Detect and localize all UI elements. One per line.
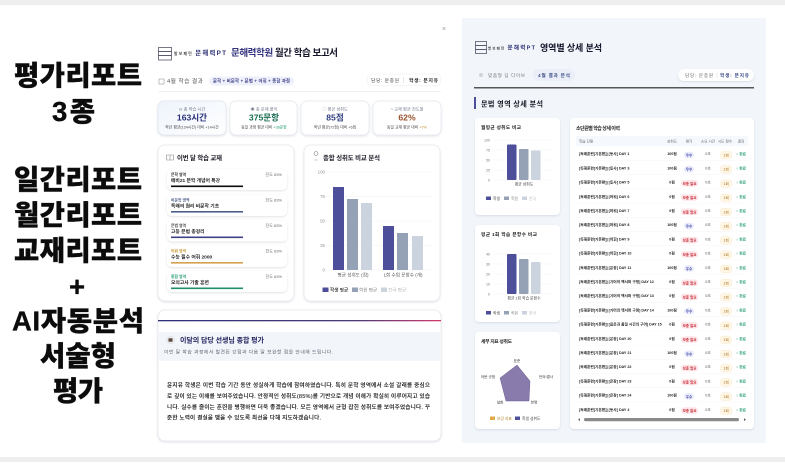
- textbook: non-fiction: 비문학 영역: [171, 198, 190, 202]
- section heading: [474, 97, 543, 109]
- textbook: grammar: 고등 문법 총정리: [171, 228, 205, 235]
- brand name: 발보패턴 문해력PT: [174, 48, 226, 57]
- month label: 4월 학습 결과: [167, 77, 204, 85]
- completed status: ○ 완료: [736, 364, 747, 369]
- time spent: 0초: [705, 365, 711, 369]
- textbook: grammar: 문법 영역: [171, 223, 187, 228]
- grade badges: 우수: [686, 309, 693, 314]
- kpi: total study time: [158, 101, 226, 135]
- panel: average problems per session: [475, 225, 560, 322]
- time spent: 0초: [705, 308, 711, 312]
- scores: 0점: [669, 336, 675, 341]
- detail analysis page: [462, 18, 766, 443]
- completed status: ○ 완료: [736, 265, 747, 270]
- radar chart: 본명: [531, 400, 537, 404]
- unit names: [독해훈련[기본편]] [어휘] DAY 8: [579, 222, 629, 227]
- textbook: literature: 문학 영역: [171, 172, 187, 177]
- evaluation body: 준한 노력이 결실을 맺을 수 있도록 최선을 다해 지도하겠습니다.: [167, 414, 321, 422]
- bar chart: 100: [484, 138, 490, 142]
- completed status: ○ 완료: [736, 350, 747, 355]
- bar chart: [318, 170, 432, 278]
- scores: 100점: [667, 222, 677, 227]
- panel: overall achievement comparison: [304, 145, 440, 301]
- legend: 전국: [529, 310, 536, 315]
- radar chart: [481, 359, 554, 404]
- kpi: average score: 85점: [326, 112, 344, 122]
- time spent: 0초: [705, 351, 711, 355]
- left caption text: 평가: [53, 376, 103, 406]
- bar chart: 0: [488, 178, 490, 182]
- table title: 소단원별 학습 상세 이력: [576, 125, 620, 132]
- bar chart: 평균 성취도: [515, 182, 534, 186]
- unit names: [독해훈련[기본편]] [어휘] DAY 7: [579, 208, 629, 213]
- textbook: vocabulary: 수능 필수 어휘 2000: [171, 254, 212, 260]
- chart legend: 학생 평균: [330, 286, 349, 294]
- textbook: mock exam: [167, 271, 287, 292]
- unit names: [독해훈련[기본편]] [기어의 맥서머 구멍] DAY 12: [579, 279, 654, 284]
- panel: monthly achievement: [475, 118, 560, 215]
- scores: 0점: [669, 208, 675, 213]
- scores: 100점: [667, 165, 677, 170]
- textbook: grammar: 진도 63%: [266, 222, 282, 228]
- section heading: 문법 영역 상세 분석: [481, 100, 543, 108]
- scores: 0점: [669, 279, 675, 284]
- scores: 100점: [667, 151, 677, 156]
- attempt badges: 1회: [723, 380, 729, 385]
- unit names: [독해훈련[기본편]] [동사] DAY 4: [579, 407, 630, 412]
- grade badges: 보충 필요: [683, 380, 697, 385]
- radar chart: 표준: [514, 359, 521, 363]
- unit names: [독해훈련[기본편]] [어휘] DAY 9: [579, 236, 629, 241]
- left caption text: AI자동분석: [12, 306, 144, 336]
- legend: 학생: [493, 196, 500, 201]
- legend: 학원: [511, 310, 518, 315]
- unit names: [독해훈련[기본편]] [어휘] DAY 6: [579, 194, 629, 199]
- grade badges: 우수: [686, 351, 693, 356]
- scrollbar: [578, 418, 746, 421]
- textbook: literature: 메비21 문학 개념어 특강: [171, 177, 221, 184]
- scores: 0점: [669, 378, 675, 383]
- legend: 전국: [529, 196, 536, 201]
- bar chart: 75: [486, 148, 490, 152]
- monthly report page: [158, 26, 446, 441]
- attempt badges: 1회: [723, 309, 729, 314]
- scores: 0점: [669, 236, 675, 241]
- completed status: ○ 완료: [736, 236, 747, 241]
- bar chart: 0: [323, 268, 326, 272]
- attempt badges: 1회: [723, 351, 729, 356]
- textbook: vocabulary: 진도 63%: [266, 248, 282, 254]
- brand name: 발보패턴 문해력PT: [488, 44, 536, 52]
- grade badges: 보충 필요: [683, 238, 697, 243]
- grade badges: [681, 152, 698, 414]
- scores: [667, 151, 677, 412]
- left caption text: +: [69, 271, 85, 302]
- bar chart: 25: [320, 243, 326, 248]
- radar chart: 언어/결사: [539, 374, 554, 379]
- chart legend: [322, 286, 406, 294]
- attempt badges: 1회: [723, 195, 729, 200]
- unit names: [독해훈련[기본편]] [음운과 품질 시간의 구어] DAY 15: [579, 322, 662, 327]
- completed status: ○ 완료: [736, 279, 747, 284]
- grade badges: 우수: [686, 266, 693, 271]
- grade badges: 우수: [686, 152, 693, 158]
- completed status: ○ 완료: [736, 180, 747, 185]
- scores: 100점: [667, 393, 677, 398]
- left caption text: 일간리포트: [14, 164, 142, 195]
- completed status: ○ 완료: [736, 293, 747, 298]
- icon: book: [166, 155, 174, 160]
- kpi: curriculum progress: 동일 교재 평균 대비 +7%: [387, 124, 428, 130]
- grade badges: 보충 필요: [683, 294, 697, 300]
- table header: [576, 136, 748, 146]
- unit names: [579, 151, 662, 412]
- bar chart: 75: [320, 194, 326, 199]
- scores: 100점: [667, 350, 677, 355]
- evaluation body: 윤지유 학생은 이번 학습 기간 동안 성실하게 학습에 참여하였습니다. 특히 문학 영역에서 소설 갈래를 중심으: [167, 381, 430, 389]
- scores: 0점: [669, 322, 675, 327]
- kpi: total problems: ◉ 총 문제 풀이: [251, 106, 278, 112]
- evaluation heading: 이달의 담당 선생님 종합 평가: [180, 336, 265, 344]
- scores: 100점: [667, 265, 677, 270]
- time spent: 0초: [705, 166, 711, 170]
- completed status: ○ 완료: [736, 208, 747, 213]
- teacher and student pill: 학생: 문지유: [720, 72, 750, 79]
- time spent: 0초: [705, 152, 711, 156]
- heading: 종합 성취도 비교 분석: [323, 153, 380, 162]
- kpi: average score: 학년 평균(72점) 대비 +6점: [314, 124, 357, 130]
- completed status: [736, 151, 747, 412]
- unit names: [독해훈련[기본편]] [문장] DAY 11: [579, 265, 631, 270]
- table header: 시도 횟수: [718, 138, 733, 144]
- bar chart: 30: [486, 262, 490, 266]
- left caption text: 교재리포트: [14, 235, 142, 266]
- unit names: [독해훈련[기본편]] [문장] DAY 23: [579, 378, 631, 383]
- unit names: [독해훈련[기본편]] [어휘] DAY 10: [579, 251, 631, 256]
- report title: 문해력학원 월간 학습 보고서: [231, 47, 338, 59]
- teacher and student pill: 학생: 문지유: [409, 77, 439, 84]
- bar chart: 평균 성취도 (점): [338, 272, 369, 278]
- unit names: [독해훈련[기본편]] [동사] DAY 3: [579, 165, 629, 170]
- legend: [486, 196, 536, 201]
- time spent: 0초: [705, 337, 711, 341]
- tab: april analysis: 4월 결과 분석: [538, 72, 570, 79]
- bar chart: 50: [486, 158, 490, 162]
- time spent: 0초: [705, 408, 711, 412]
- completed status: ○ 완료: [736, 393, 747, 398]
- legend: 학생: [493, 310, 500, 315]
- bar chart: 0: [488, 292, 490, 296]
- table header: 학습 단원: [579, 138, 593, 144]
- logo: [158, 48, 172, 60]
- left caption text: 평가리포트: [14, 60, 142, 91]
- kpi: total problems: 동일 과정 평균 대비 +36문항: [241, 124, 287, 130]
- left caption text: 월간리포트: [14, 200, 142, 230]
- kpi: average score: ◯ 평균 성취도: [322, 106, 348, 112]
- time spent: 0초: [705, 323, 711, 327]
- radar chart: 어문 규범: [481, 374, 495, 379]
- grade badges: 보충 필요: [683, 209, 697, 214]
- left caption text: 3종: [52, 96, 95, 127]
- bar chart: 1회 수업 문항수 (개): [383, 272, 423, 278]
- completed status: ○ 완료: [736, 322, 747, 327]
- completed status: ○ 완료: [736, 336, 747, 341]
- attempt badges: 1회: [723, 224, 729, 228]
- table header: 성취도: [667, 138, 678, 144]
- attempt badges: 1회: [723, 238, 729, 243]
- time spent: 0초: [705, 379, 711, 383]
- completed status: ○ 완료: [736, 165, 747, 170]
- bar chart: [484, 138, 552, 186]
- legend: [490, 416, 541, 421]
- time spent: 0초: [705, 394, 711, 398]
- textbook: non-fiction: 진도 63%: [266, 196, 282, 202]
- kpi: curriculum progress: ~ 교재 평균 진도율: [391, 106, 424, 112]
- scores: 0점: [669, 293, 675, 298]
- kpi: total problems: 375문항: [249, 112, 279, 122]
- attempt badges: [720, 152, 732, 415]
- unit names: [독해훈련[기본편]] [기어의 맥서머 구멍] DAY 14: [579, 307, 655, 312]
- table header: 결과: [738, 138, 745, 144]
- time spent: 0초: [705, 209, 711, 213]
- completed status: ○ 완료: [736, 407, 747, 412]
- bar chart: 50: [320, 218, 326, 224]
- textbook: literature: 진도 63%: [266, 171, 282, 177]
- bar chart: 25: [486, 168, 490, 172]
- panel: average problems per session: 평균 1회 학습 문항수 비교: [481, 231, 538, 238]
- grade badges: 보충 필요: [683, 337, 697, 342]
- completed status: ○ 완료: [736, 222, 747, 227]
- attempt badges: 1회: [723, 323, 729, 328]
- heading: 이번 달 학습 교재: [177, 153, 222, 162]
- textbook: non-fiction: [167, 195, 287, 216]
- textbook: literature: [167, 169, 287, 190]
- legend: 보강 지표: [497, 416, 513, 421]
- bar chart: 10: [486, 282, 490, 286]
- attempt badges: 1회: [723, 152, 729, 158]
- chart legend: 학원 평균: [359, 286, 377, 294]
- logo: [476, 42, 486, 54]
- evaluation subheading: 이번 달 학습 과정에서 발견된 강점과 다음 달 보완할 점을 안내해 드립니다.: [164, 348, 333, 356]
- grade badges: 보충 필요: [683, 323, 697, 328]
- table header: 평가: [686, 138, 693, 144]
- attempt badges: 1회: [723, 394, 729, 399]
- grade badges: 우수: [686, 394, 693, 399]
- grade badges: 보충 필요: [683, 408, 697, 413]
- kpi: total study time: ◷ 총 학습 시간: [179, 106, 205, 112]
- grade badges: 우수: [686, 167, 693, 172]
- icon: note: [166, 336, 175, 344]
- time spent: 0초: [705, 266, 711, 270]
- scores: 0점: [669, 251, 675, 256]
- grade badges: 우수: [686, 224, 693, 228]
- table header: 소요 시간: [701, 138, 716, 144]
- time spent: 0초: [705, 252, 711, 256]
- attempt badges: 1회: [723, 280, 729, 285]
- completed status: ○ 완료: [736, 378, 747, 383]
- evaluation body: 로 깊이 있는 이해를 보여주었습니다. 안정적인 성취도(85%)를 기반으로 개념 이해가 확실히 이루어지고 있습: [167, 392, 430, 400]
- scores: 0점: [669, 180, 675, 185]
- panel: unit detail table: [570, 118, 754, 429]
- teacher and student pill: [367, 74, 441, 86]
- left caption text: [12, 60, 144, 406]
- tab: april analysis: [533, 69, 575, 81]
- icon: bulb: [314, 152, 318, 160]
- unit names: [독해훈련[기본편]] [문장] DAY 24: [579, 393, 632, 398]
- close mark: ×: [442, 26, 446, 33]
- panel: detailed indicator achievement: [475, 332, 560, 429]
- attempt badges: 1회: [723, 266, 729, 271]
- textbook: vocabulary: [167, 246, 287, 267]
- scores: 100점: [667, 307, 677, 312]
- unit names: [독해훈련[기본편]] [문장] DAY 21: [579, 350, 631, 355]
- attempt badges: 1회: [723, 337, 729, 342]
- scores: 0점: [669, 407, 675, 412]
- attempt badges: 1회: [723, 252, 729, 257]
- time spent: [705, 152, 711, 412]
- completed status: ○ 완료: [736, 194, 747, 199]
- bar chart: 100: [318, 170, 326, 174]
- radar chart: 설화: [497, 400, 504, 404]
- unit names: [독해훈련[기본편]] [동사] DAY 1: [579, 151, 629, 156]
- time spent: 0초: [705, 280, 711, 284]
- panel: detailed indicator achievement: 세부 지표 성취도: [481, 338, 513, 345]
- table rows: [576, 151, 748, 415]
- attempt badges: 1회: [723, 167, 729, 172]
- panel: monthly achievement: 월평균 성취도 비교: [481, 124, 522, 131]
- time spent: 0초: [705, 181, 711, 185]
- legend: 학원: [511, 196, 518, 201]
- kpi: curriculum progress: 62%: [398, 112, 416, 122]
- page title: 영역별 상세 분석: [540, 42, 602, 53]
- evaluation body: 니다. 실수를 줄이는 훈련을 병행하면 더욱 좋겠습니다. 모든 영역에서 균형 잡힌 성취도를 보여주었습니다. 꾸: [167, 403, 430, 411]
- grade badges: 보충 필요: [683, 366, 697, 370]
- tab: deep dive: [479, 72, 525, 79]
- attempt badges: 1회: [723, 294, 729, 300]
- grade badges: 보충 필요: [683, 252, 697, 257]
- unit names: [독해훈련[기본편]] [문장] DAY 20: [579, 336, 631, 341]
- bar chart: 평균 1회 학습 문항수: [507, 296, 541, 300]
- unit names: [독해훈련[기본편]] [문장] DAY 22: [579, 364, 631, 369]
- grade badges: 보충 필요: [683, 280, 697, 285]
- attempt badges: 1회: [723, 408, 729, 413]
- teacher and student pill: 담당: 문종원: [371, 77, 399, 84]
- time spent: 0초: [705, 294, 711, 298]
- panel: this month's textbooks: [158, 145, 294, 301]
- kpi: curriculum progress: [373, 101, 441, 135]
- bar chart: [486, 252, 552, 300]
- time spent: 0초: [705, 237, 711, 241]
- time spent: 0초: [705, 223, 711, 227]
- attempt badges: 1회: [723, 209, 729, 214]
- completed status: ○ 완료: [736, 151, 747, 156]
- kpi: total study time: 학년 평균(124시간) 대비 +14시간: [165, 124, 219, 130]
- unit names: [독해훈련[기본편]] [기어의 맥서머 구멍] DAY 13: [579, 293, 654, 298]
- teacher and student pill: 담당: 문종원: [685, 72, 713, 78]
- scores: 0점: [669, 364, 675, 369]
- subject pill: 문학 + 비문학 + 문법 + 어휘 + 종합 과정: [213, 78, 290, 84]
- kpi: average score: [301, 101, 369, 135]
- textbook: grammar: [167, 220, 287, 242]
- grade badges: 보충 필요: [683, 181, 697, 186]
- textbook: vocabulary: 어휘 영역: [171, 248, 187, 254]
- textbook: mock exam: 진도 63%: [266, 273, 282, 279]
- textbook: mock exam: 종합 영역: [171, 274, 187, 279]
- evaluation body: [167, 381, 430, 422]
- chart legend: 전국 평균: [388, 286, 406, 294]
- time spent: 0초: [705, 195, 711, 199]
- attempt badges: 1회: [723, 181, 729, 186]
- tab: deep dive: 맞춤형 딥 다이브: [488, 72, 525, 79]
- bar chart: 40: [486, 252, 490, 256]
- grade badges: 보충 필요: [683, 195, 697, 200]
- legend: 학생 성취도: [522, 416, 541, 421]
- unit names: [독해훈련[기본편]] [동사] DAY 5: [579, 180, 629, 185]
- textbook: mock exam: 모의고사 기출 훈련: [171, 279, 209, 286]
- subject pill: [209, 76, 294, 86]
- attempt badges: 1회: [723, 366, 729, 370]
- month label: [159, 77, 204, 85]
- completed status: ○ 완료: [736, 251, 747, 256]
- panel: teacher evaluation: [158, 310, 441, 441]
- completed status: ○ 완료: [736, 307, 747, 312]
- header band: [159, 332, 440, 361]
- left caption text: 서술형: [40, 340, 116, 372]
- bar chart: 20: [486, 272, 490, 276]
- scores: 0점: [669, 194, 675, 199]
- kpi: total problems: [230, 101, 297, 135]
- legend: [486, 310, 536, 315]
- teacher and student pill: [678, 69, 754, 81]
- kpi: total study time: 163시간: [177, 112, 207, 122]
- textbook: non-fiction: 독해의 원리 비문학 기초: [171, 202, 220, 210]
